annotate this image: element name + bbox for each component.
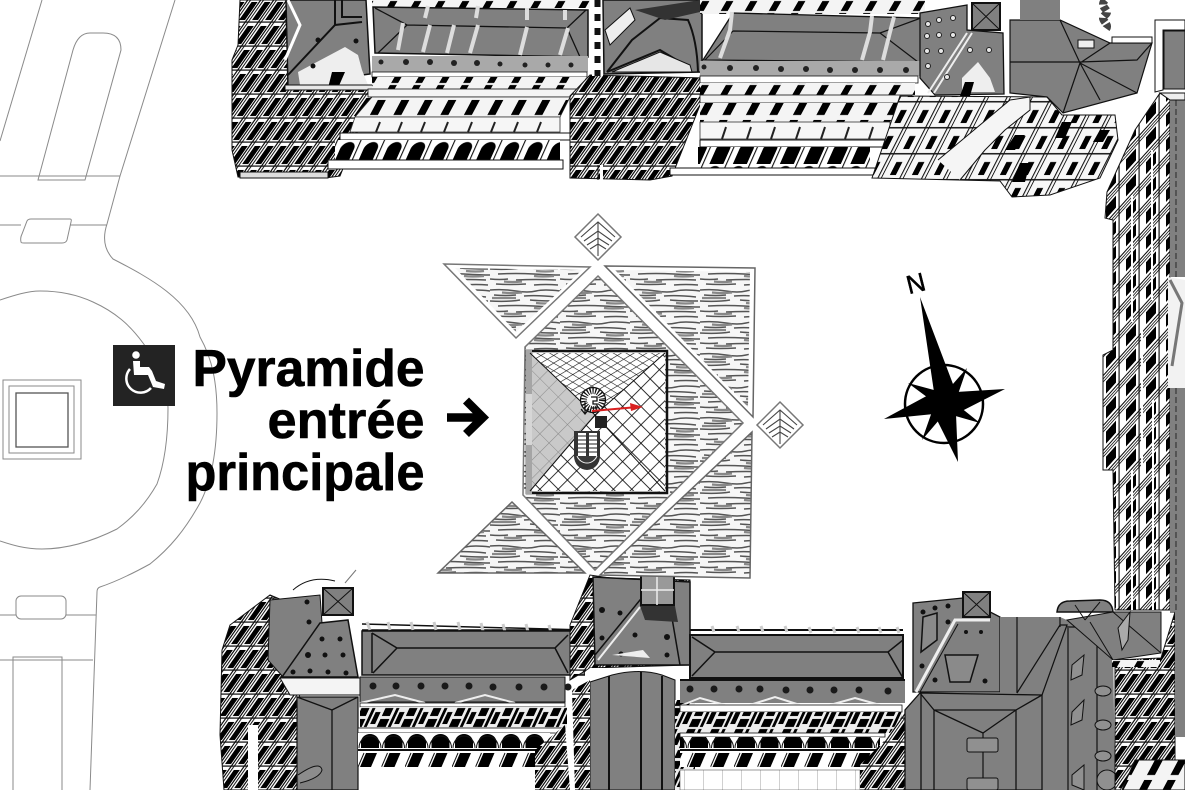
compass north label: N xyxy=(903,266,929,300)
south central pavilion xyxy=(570,575,695,790)
icon: lift square xyxy=(595,416,607,428)
south-east pavilion and roofs xyxy=(905,592,1185,790)
icon: wheelchair badge xyxy=(113,345,175,406)
north wing, east section xyxy=(670,0,925,175)
small pyramid: north xyxy=(575,214,621,260)
basin: top-right triangle xyxy=(605,266,755,417)
north central pavilion xyxy=(570,0,704,180)
north-east pavilion and corner roof xyxy=(872,0,1152,197)
icon: small down arrow xyxy=(581,402,589,414)
plaza outline: roundabout and roads xyxy=(0,0,217,790)
label: Pyramide entrée principale xyxy=(186,339,424,501)
label: Pyramide entrée principale: principale xyxy=(186,443,424,501)
basin: central diamond around pyramid xyxy=(523,276,743,570)
building: east wing xyxy=(1103,20,1185,613)
arrow: pointing to pyramid xyxy=(447,400,483,434)
basin: bottom-left triangle xyxy=(438,502,585,573)
small pyramid: east xyxy=(757,402,803,448)
south wing, east section xyxy=(680,626,905,790)
arrow: red direction xyxy=(592,403,643,411)
basin: top-left triangle xyxy=(444,264,590,338)
north-west pavilion xyxy=(232,0,373,178)
label: Pyramide entrée principale: Pyramide xyxy=(192,339,424,397)
icon: escalators xyxy=(574,431,600,470)
basin: bottom-right triangle xyxy=(600,432,752,578)
south wing, west section xyxy=(358,622,585,790)
icon: spiral staircase xyxy=(580,388,606,412)
hatching: top-right basin xyxy=(615,270,750,407)
label: Pyramide entrée principale: entrée xyxy=(268,391,424,449)
icon: compass rose xyxy=(884,266,1005,462)
south-west pavilion xyxy=(220,570,360,790)
hatching: top-left basin xyxy=(455,268,582,332)
pyramid: glass faces xyxy=(526,350,667,494)
pyramid and courtyard basins xyxy=(438,214,803,578)
building: south wing xyxy=(220,570,1185,790)
north wing, west section xyxy=(328,0,590,169)
building: north wing xyxy=(232,0,1152,197)
